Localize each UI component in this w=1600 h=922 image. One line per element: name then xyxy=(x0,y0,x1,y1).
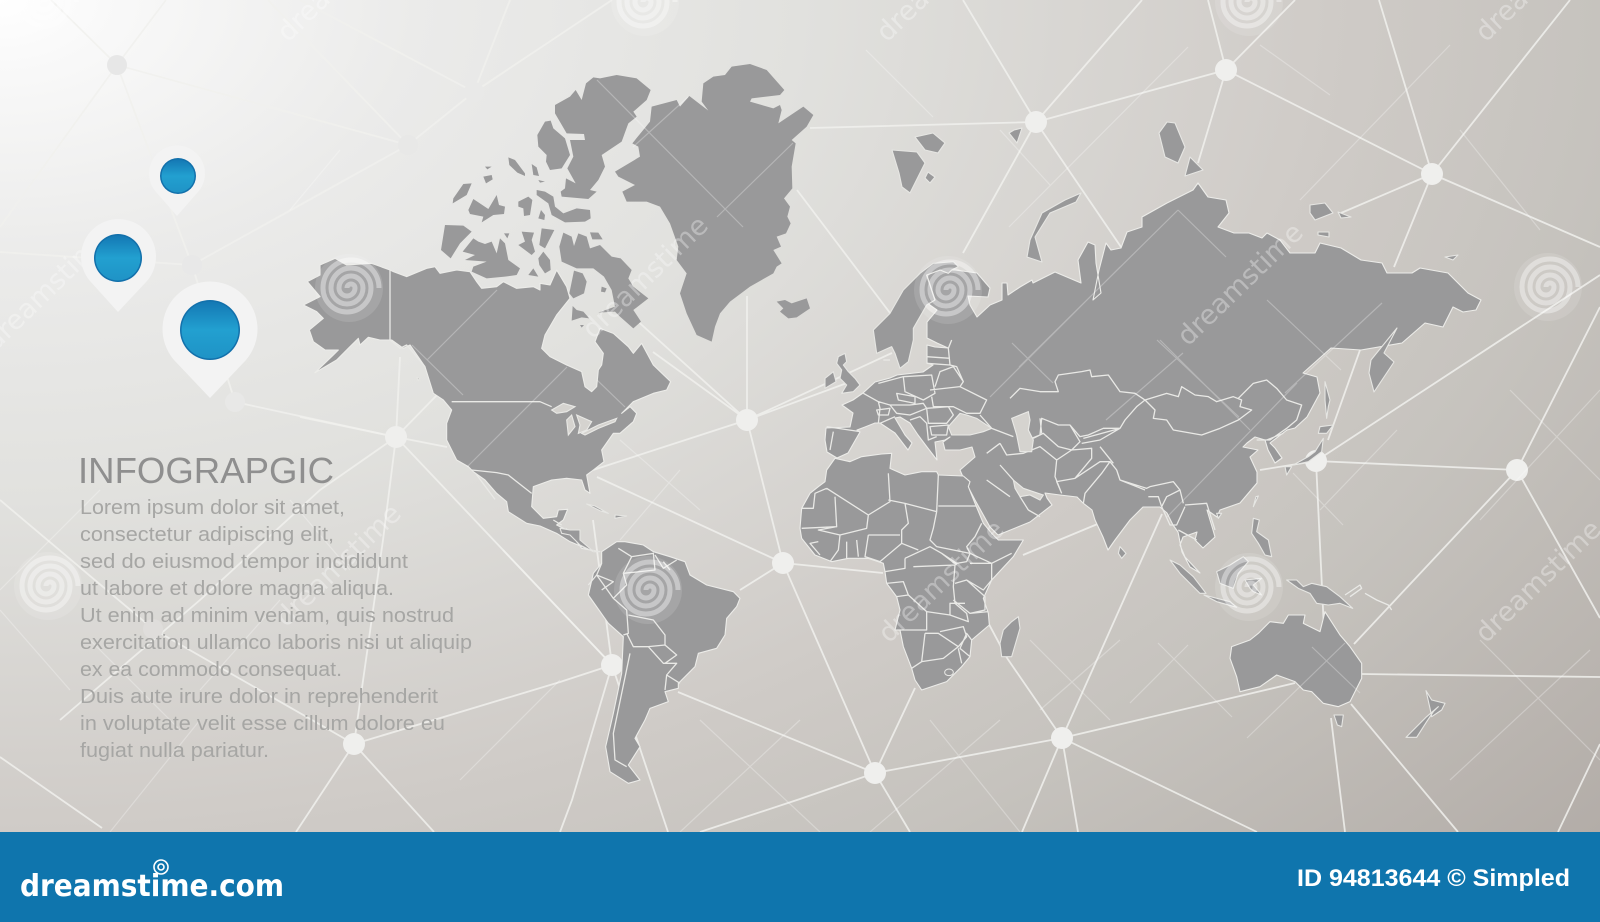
European borders xyxy=(827,275,1013,450)
body text: consectetur adipiscing elit, xyxy=(80,524,334,546)
body text: Duis aute irure dolor in reprehenderit xyxy=(80,686,438,708)
Pacific island chains xyxy=(1345,585,1392,610)
country borders xyxy=(588,548,680,767)
Tasmania and New Zealand xyxy=(1334,691,1445,737)
national borders xyxy=(390,270,567,533)
Asian islands xyxy=(1118,382,1333,558)
Indonesia, New Guinea and the Philippines xyxy=(1170,518,1353,608)
watermark text: dreamstime xyxy=(1171,217,1310,352)
body text: ut labore et dolore magna aliqua. xyxy=(80,578,394,600)
country borders xyxy=(802,473,1012,668)
world map xyxy=(303,64,1481,783)
Central America xyxy=(560,528,600,552)
pin: large xyxy=(163,282,258,398)
logo text: dreamstime.com xyxy=(20,869,284,904)
location pins xyxy=(81,145,258,398)
Caribbean islands xyxy=(417,377,627,518)
body text: ex ea commodo consequat. xyxy=(80,659,342,681)
Eurasia landmass xyxy=(825,183,1481,573)
Asian borders xyxy=(987,370,1302,540)
Oceania and South-East Asian islands xyxy=(1170,518,1445,737)
Great Lakes xyxy=(552,403,617,435)
watermark text: dreamstime xyxy=(269,498,408,633)
continent outline xyxy=(800,453,1023,690)
body text xyxy=(80,497,472,762)
Australia xyxy=(1230,612,1362,707)
Norway and Sweden xyxy=(873,262,958,368)
Ellesmere Island xyxy=(555,75,651,199)
Russian arctic islands xyxy=(892,122,1458,392)
watermark text: dreamstime xyxy=(872,514,1011,649)
Alaska, Canada, USA and Mexico landmass xyxy=(303,258,671,550)
Madagascar xyxy=(1000,617,1020,657)
Africa xyxy=(800,453,1023,690)
Greenland xyxy=(615,64,813,342)
continent outline xyxy=(588,542,740,783)
Canadian arctic islands xyxy=(441,121,648,328)
South America xyxy=(560,528,740,783)
pin: medium xyxy=(81,219,156,312)
Iceland xyxy=(777,298,810,318)
watermark spirals xyxy=(12,0,1582,624)
Black Sea xyxy=(948,413,992,435)
body text: sed do eiusmod tempor incididunt xyxy=(80,551,408,573)
image credit: ID 94813644 © Simpled xyxy=(1297,865,1570,892)
Lesotho xyxy=(945,669,953,676)
watermark text: dreamstime xyxy=(576,210,715,345)
title: INFOGRAPGIC xyxy=(78,450,334,491)
body text: exercitation ullamco laboris nisi ut aliquip xyxy=(80,632,472,654)
network nodes xyxy=(107,55,1528,784)
logo spiral icon xyxy=(154,860,168,874)
Eurasia xyxy=(825,122,1481,573)
Caspian Sea and Persian Gulf xyxy=(1012,412,1043,500)
footer band xyxy=(0,832,1600,922)
body text: Lorem ipsum dolor sit amet, xyxy=(80,497,345,519)
North America xyxy=(303,258,671,550)
pin: small xyxy=(149,145,205,216)
watermark text xyxy=(0,0,1600,649)
body text: in voluptate velit esse cillum dolore eu xyxy=(80,713,445,735)
body text: Ut enim ad minim veniam, quis nostrud xyxy=(80,605,454,627)
British Isles xyxy=(825,353,860,393)
arctic islands and Greenland xyxy=(441,64,813,342)
body text: fugiat nulla pariatur. xyxy=(80,740,269,762)
